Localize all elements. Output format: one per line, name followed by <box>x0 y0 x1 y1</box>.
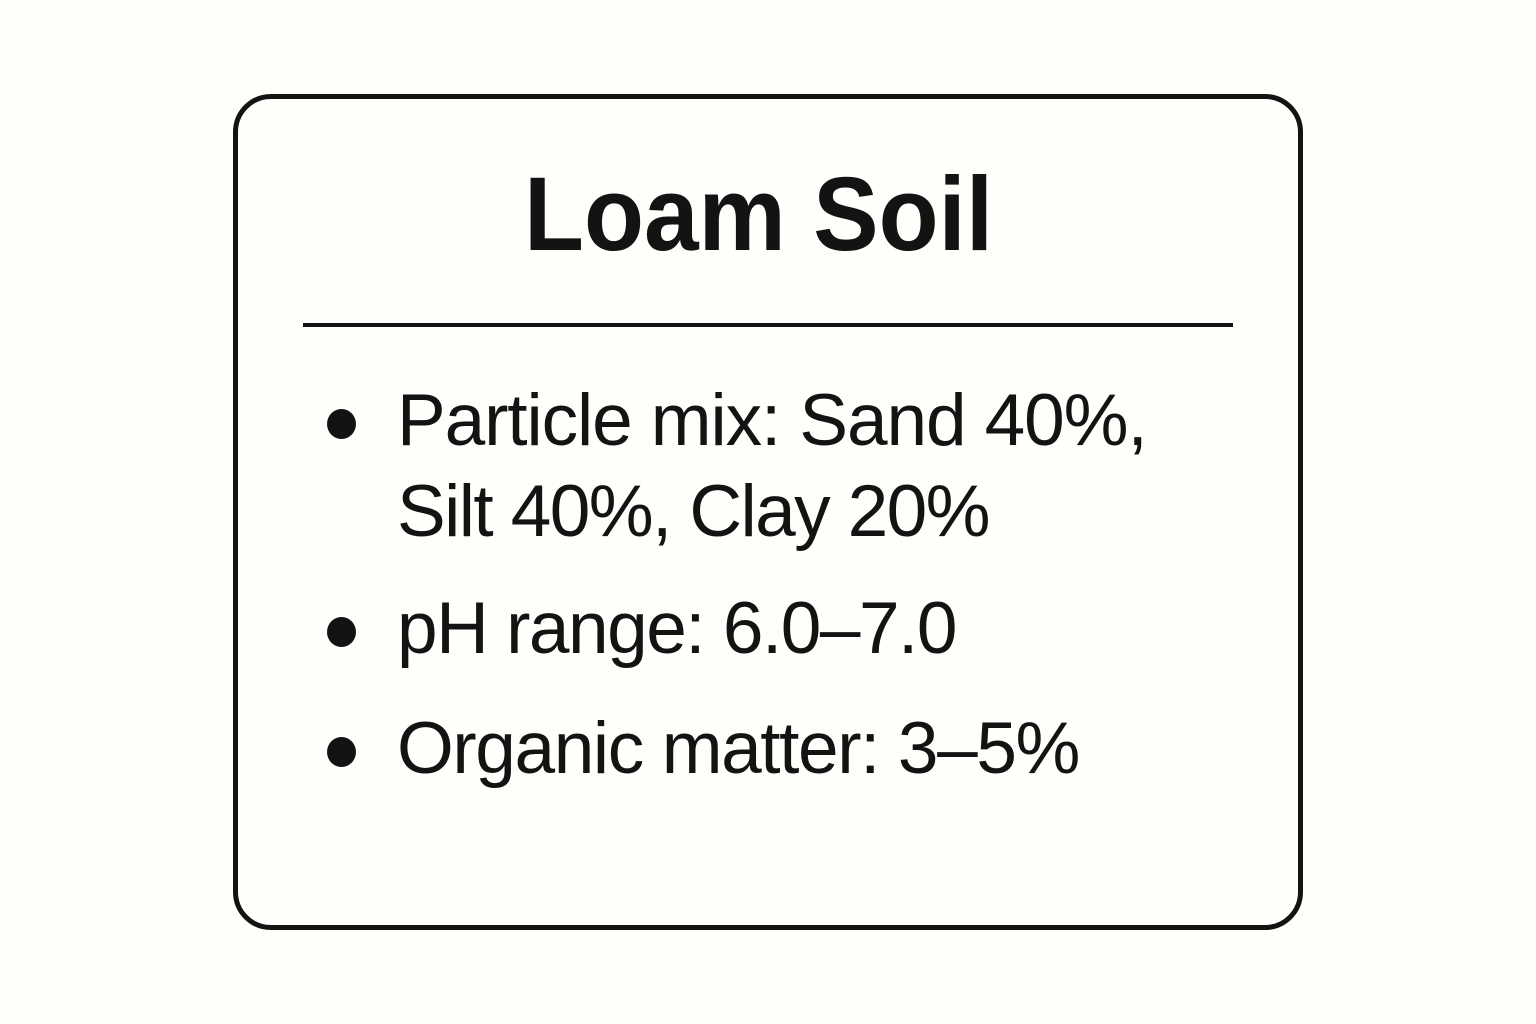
divider <box>303 323 1233 327</box>
bullet 2 dot <box>327 617 356 647</box>
bullet 1 text <box>397 380 1147 552</box>
title: Loam Soil <box>524 156 993 273</box>
bullet 1 text: Silt 40%, Clay 20% <box>397 471 989 552</box>
bullet 1 text: Particle mix: Sand 40%, <box>397 380 1147 461</box>
bullet 1 dot <box>327 409 356 439</box>
bullet 2 text: pH range: 6.0–7.0 <box>397 588 956 669</box>
panel: loam soil card <box>233 94 1303 930</box>
bullet 3 dot <box>327 737 356 767</box>
bullet 3 text: Organic matter: 3–5% <box>397 708 1079 789</box>
